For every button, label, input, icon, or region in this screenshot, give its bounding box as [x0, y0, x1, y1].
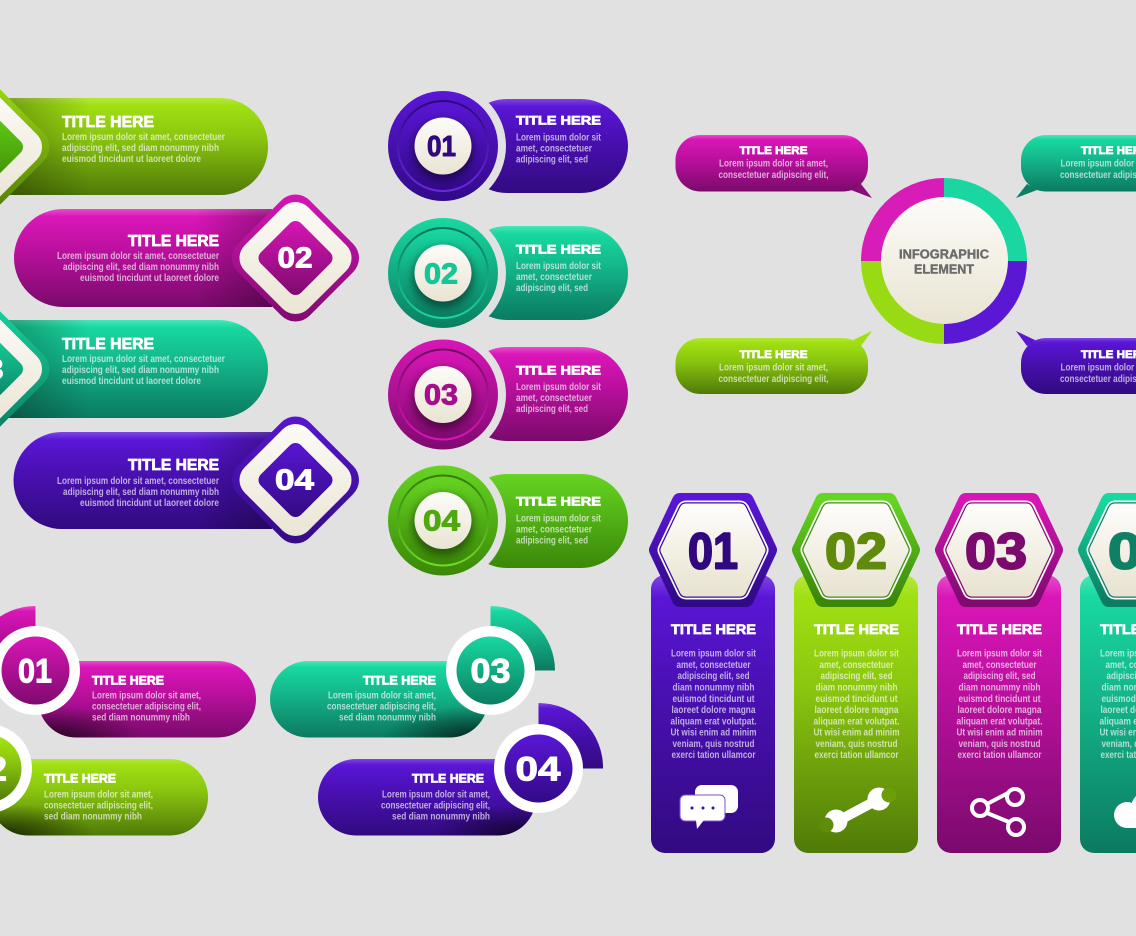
banner 04 purple: Lorem ipsum dolor sit amet, consectetuer: [57, 476, 219, 487]
card 03 magenta: TITLE HERE: [957, 621, 1042, 637]
card 02 green: laoreet dolore magna: [814, 705, 899, 716]
card 02 green: diam nonummy nibh: [816, 682, 898, 694]
banner 02 magenta: adipiscing elit, sed diam nonummy nibh: [63, 262, 219, 273]
callout magenta: consectetuer adipiscing elit,: [718, 170, 829, 181]
banner 03 teal: euismod tincidunt ut laoreet dolore: [62, 376, 201, 387]
button 03 magenta: [380, 332, 628, 458]
button 02 teal: TITLE HERE: [516, 242, 601, 256]
card 01 purple: exerci tation ullamcor: [672, 750, 756, 761]
banner 03 teal: adipiscing elit, sed diam nonummy nibh: [62, 365, 219, 376]
button 01 purple: [380, 83, 628, 209]
card 01 purple: adipiscing elit, sed: [678, 671, 750, 682]
pill 03 teal: Lorem ipsum dolor sit amet,: [328, 690, 436, 702]
card 02 green: Lorem ipsum dolor sit: [814, 648, 900, 660]
pill 04 purple: consectetuer adipiscing elit,: [381, 800, 490, 812]
card 03 magenta: [937, 501, 1061, 853]
button 01 purple: TITLE HERE: [516, 114, 601, 128]
button 02 teal: 02: [424, 258, 458, 290]
card 02 green: veniam, quis nostrud: [816, 739, 898, 750]
button 01 purple: adipiscing elit, sed: [516, 154, 588, 166]
banner 03 teal: TITLE HERE: [62, 336, 154, 353]
panel: ring diagram with callouts: [676, 135, 1136, 394]
panel: numbered pills: [0, 606, 603, 836]
card 01 purple: veniam, quis nostrud: [672, 739, 754, 750]
card 01 purple: laoreet dolore magna: [672, 705, 756, 716]
button 04 green: TITLE HERE: [516, 494, 601, 508]
banner 01 green: Lorem ipsum dolor sit amet, consectetuer: [62, 132, 225, 143]
callout green: TITLE HERE: [740, 349, 808, 361]
banner 04 purple: adipiscing elit, sed diam nonummy nibh: [63, 487, 219, 498]
card 02 green: adipiscing elit, sed: [820, 671, 892, 682]
pill 01 magenta: [0, 606, 256, 738]
card 02 green: TITLE HERE: [814, 621, 899, 637]
panel: circle button list: [380, 83, 628, 584]
card 03 magenta: 03: [965, 522, 1027, 580]
pill 02 green: TITLE HERE: [44, 772, 116, 786]
card 03 magenta: amet, consectetuer: [962, 660, 1037, 671]
card 02 green: 02: [825, 522, 887, 580]
banner 01 green: [0, 75, 268, 219]
button 04 green: [380, 458, 628, 584]
button 03 magenta: amet, consectetuer: [516, 393, 592, 404]
callout green: [676, 331, 872, 394]
card 01 purple: euismod tincidunt ut: [672, 694, 755, 705]
icon: wrench: [818, 788, 896, 832]
pill 04 purple: sed diam nonummy nibh: [392, 812, 490, 822]
card 03 magenta: adipiscing elit, sed: [964, 671, 1036, 682]
pill 03 teal: TITLE HERE: [363, 674, 436, 688]
card 03 magenta: exerci tation ullamcor: [958, 750, 1042, 761]
pill 01 magenta: 01: [18, 652, 52, 690]
callout teal: [1016, 135, 1136, 198]
card 01 purple: diam nonummy nibh: [672, 682, 754, 694]
card 04 teal: [1080, 501, 1136, 853]
banner 02 magenta: [14, 186, 367, 330]
card 02 green: aliquam erat volutpat.: [814, 716, 900, 728]
card 01 purple: 01: [688, 522, 738, 580]
card 03 magenta: aliquam erat volutpat.: [956, 716, 1043, 728]
card 03 magenta: veniam, quis nostrud: [958, 739, 1040, 750]
pill 03 teal: 03: [470, 652, 510, 690]
pill 04 purple: Lorem ipsum dolor sit amet,: [382, 790, 490, 800]
panel: hexagon cards: [651, 501, 1136, 853]
banner 02 magenta: TITLE HERE: [128, 233, 219, 250]
callout magenta: Lorem ipsum dolor sit amet,: [719, 158, 828, 170]
banner 02 magenta: euismod tincidunt ut laoreet dolore: [80, 273, 219, 284]
pill 02 green: Lorem ipsum dolor sit amet,: [44, 790, 153, 800]
button 02 teal: amet, consectetuer: [516, 272, 592, 283]
ring chart: [861, 178, 1027, 344]
banner 04 purple: TITLE HERE: [128, 457, 219, 474]
pill 04 purple: TITLE HERE: [412, 772, 484, 786]
ring chart: INFOGRAPHIC: [899, 246, 990, 262]
card 01 purple: TITLE HERE: [671, 621, 756, 637]
card 03 magenta: diam nonummy nibh: [958, 682, 1040, 694]
button 03 magenta: Lorem ipsum dolor sit: [516, 382, 602, 393]
card 01 purple: amet, consectetuer: [676, 660, 751, 671]
card 02 green: amet, consectetuer: [820, 660, 894, 671]
callout green: consectetuer adipiscing elit,: [718, 374, 829, 385]
card 01 purple: aliquam erat volutpat.: [670, 716, 757, 728]
button 04 green: 04: [423, 506, 460, 538]
pill 02 green: consectetuer adipiscing elit,: [44, 800, 153, 812]
button 03 magenta: TITLE HERE: [516, 364, 601, 378]
pill 01 magenta: sed diam nonummy nibh: [92, 712, 190, 724]
callout magenta: [676, 135, 872, 198]
ring chart: ELEMENT: [914, 262, 974, 276]
banner 01 green: euismod tincidunt ut laoreet dolore: [62, 154, 201, 165]
pill 02 green: [0, 724, 208, 836]
card 03 magenta: Lorem ipsum dolor sit: [957, 648, 1043, 660]
panel: diamond banners: [0, 75, 367, 552]
callout magenta: TITLE HERE: [740, 145, 808, 157]
banner 01 green: TITLE HERE: [62, 114, 154, 131]
card 03 magenta: Ut wisi enim ad minim: [956, 728, 1043, 738]
pill 04 purple: 04: [516, 750, 561, 788]
card 01 purple: [651, 501, 775, 853]
button 04 green: Lorem ipsum dolor sit: [516, 514, 602, 524]
button 02 teal: adipiscing elit, sed: [516, 283, 588, 294]
pill 03 teal: consectetuer adipiscing elit,: [327, 702, 436, 712]
pill 03 teal: [270, 606, 555, 738]
icon: cloud: [1114, 791, 1136, 828]
banner 04 purple: euismod tincidunt ut laoreet dolore: [80, 498, 219, 509]
banner 03 teal: Lorem ipsum dolor sit amet, consectetuer: [62, 354, 225, 365]
pill 02 green: sed diam nonummy nibh: [44, 812, 142, 822]
card 03 magenta: euismod tincidunt ut: [958, 694, 1041, 705]
banner 02 magenta: 02: [278, 242, 312, 274]
card 02 green: exerci tation ullamcor: [814, 750, 899, 761]
pill 04 purple: [318, 703, 603, 836]
banner 04 purple: [13, 408, 367, 552]
pill 01 magenta: Lorem ipsum dolor sit amet,: [92, 690, 201, 702]
button 02 teal: Lorem ipsum dolor sit: [516, 261, 602, 272]
callout purple: [1016, 331, 1136, 394]
card 03 magenta: laoreet dolore magna: [958, 705, 1042, 716]
icon: share: [972, 789, 1024, 835]
banner 01 green: adipiscing elit, sed diam nonummy nibh: [62, 143, 219, 154]
button 03 magenta: 03: [424, 380, 458, 412]
button 02 teal: [380, 210, 628, 336]
button 03 magenta: adipiscing elit, sed: [516, 404, 588, 415]
card 01 purple: Lorem ipsum dolor sit: [671, 648, 757, 660]
icon: chat bubbles: [680, 785, 738, 829]
button 04 green: amet, consectetuer: [516, 524, 592, 536]
card 01 purple: Ut wisi enim ad minim: [670, 728, 757, 738]
callout green: Lorem ipsum dolor sit amet,: [719, 362, 828, 374]
banner 03 teal: [0, 297, 268, 441]
button 01 purple: Lorem ipsum dolor sit: [516, 132, 602, 144]
pill 03 teal: sed diam nonummy nibh: [339, 712, 436, 724]
card 02 green: [794, 501, 918, 853]
banner 04 purple: 04: [275, 464, 314, 496]
button 04 green: adipiscing elit, sed: [516, 536, 588, 546]
card 02 green: Ut wisi enim ad minim: [814, 728, 900, 738]
button 01 purple: amet, consectetuer: [516, 144, 592, 154]
pill 01 magenta: TITLE HERE: [92, 674, 164, 688]
pill 01 magenta: consectetuer adipiscing elit,: [92, 702, 201, 712]
banner 02 magenta: Lorem ipsum dolor sit amet, consectetuer: [57, 251, 219, 262]
card 02 green: euismod tincidunt ut: [816, 694, 898, 705]
button 01 purple: 01: [427, 131, 456, 163]
